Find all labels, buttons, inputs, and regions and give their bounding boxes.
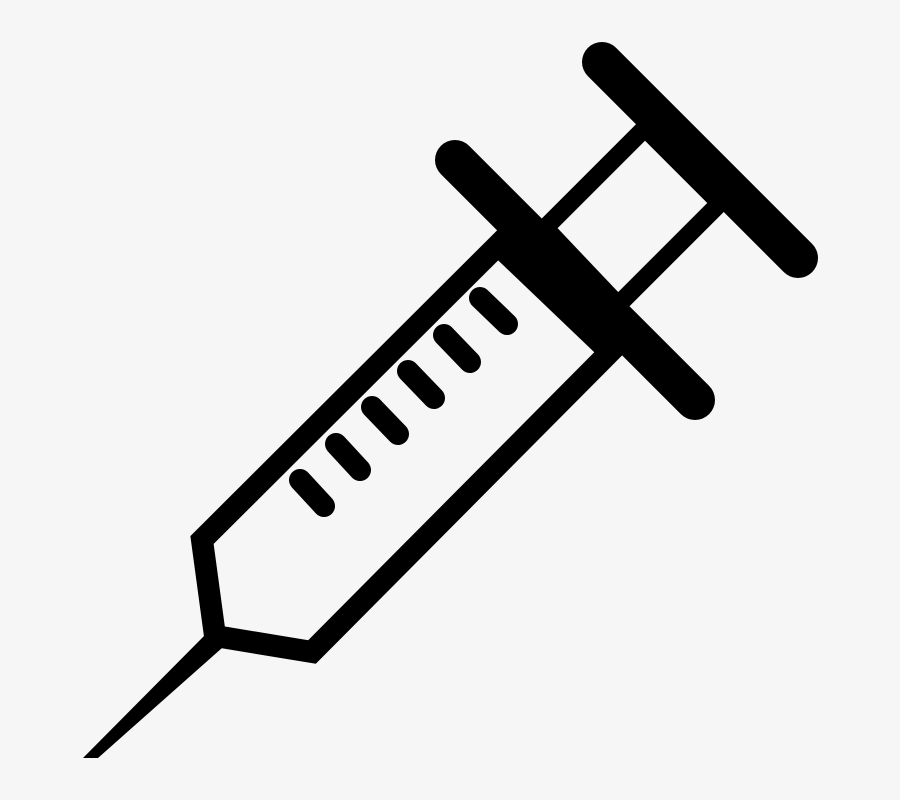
flange bar [455,160,695,400]
plunger top bar [602,62,798,258]
needle [83,633,222,758]
tick marks [300,298,507,506]
plunger rod [545,128,720,305]
barrel [202,245,610,652]
